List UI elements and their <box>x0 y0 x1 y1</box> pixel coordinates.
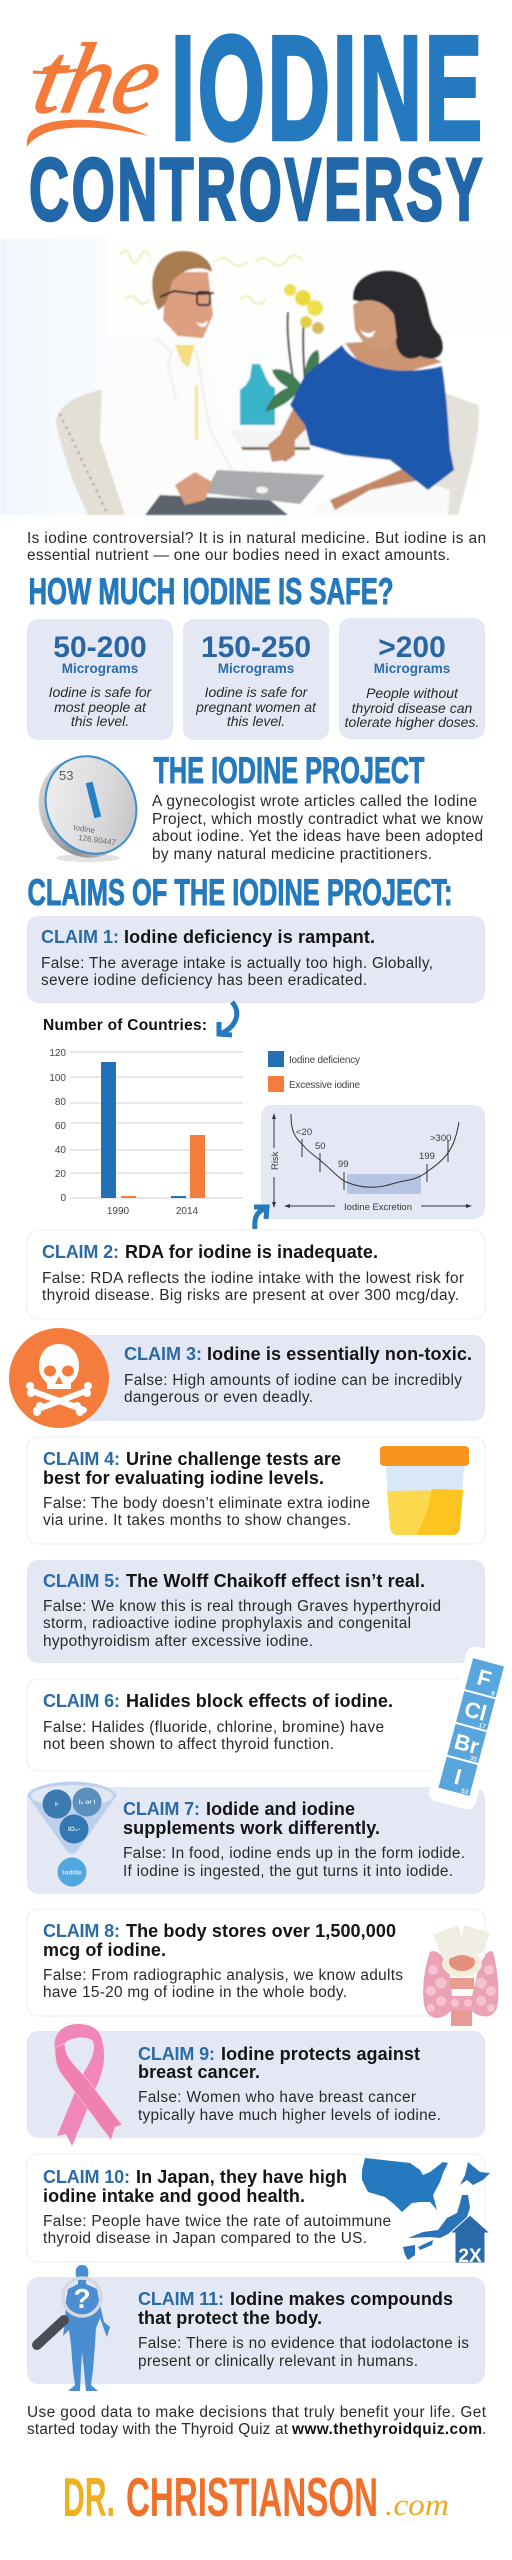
panel: 150-250 micrograms: this level. <box>227 713 285 729</box>
icon: funnel of iodine forms: Iodide <box>62 1870 82 1876</box>
bar chart: number of countries: 40 <box>55 1145 66 1156</box>
vase <box>240 364 275 425</box>
panel: 50-200 micrograms: Micrograms <box>62 661 138 676</box>
panel: claim 8 <box>27 1909 485 2016</box>
text: iodine project description: Project, which mostly contradict what we know <box>152 811 484 828</box>
panel: claim 4: via urine. It takes months to show changes. <box>43 1512 351 1529</box>
panel: claim 11: Iodine makes compounds <box>230 2289 453 2309</box>
panel: claim 9: breast cancer. <box>138 2062 260 2082</box>
panel: claim 9: False: Women who have breast cancer <box>138 2089 416 2106</box>
panel: risk curve chart: 99 <box>338 1159 349 1170</box>
panel: over 200 micrograms <box>339 618 485 739</box>
panel: 50-200 micrograms: Iodine is safe for <box>49 684 153 700</box>
panel: claim 10: thyroid disease in Japan compared to the US. <box>43 2230 367 2247</box>
panel: 50-200 micrograms: this level. <box>71 713 129 729</box>
panel: claim 2 <box>27 1230 485 1319</box>
icon: iodine element coin: 53 <box>59 768 73 783</box>
icon: thyroid gland <box>423 1925 498 2026</box>
bar chart: number of countries: 80 <box>55 1097 66 1108</box>
icon: funnel of iodine forms: IO₃- <box>68 1826 80 1833</box>
laptop <box>205 470 325 504</box>
icon: halide periodic tiles: Br <box>452 1729 482 1759</box>
panel: claim 5: False: We know this is real through Graves hyperthyroid <box>43 1598 441 1615</box>
intro text: essential nutrient — one our bodies need in exact amounts. <box>27 547 450 564</box>
chart legend: Excessive iodine <box>289 1080 360 1091</box>
right chair <box>430 393 479 515</box>
icon: iodine element coin: Iodine <box>73 823 96 835</box>
text: iodine project description: by many natural medicine practitioners. <box>152 846 432 863</box>
table <box>200 430 310 448</box>
panel: claim 9: Iodine protects against <box>221 2044 420 2064</box>
woman: arm <box>268 395 315 462</box>
man: coat <box>100 330 258 515</box>
icon: body with magnifying glass: ? <box>73 2283 91 2314</box>
photo: doctor and patient with laptop <box>0 238 512 515</box>
panel: claim 3: Iodine is essentially non-toxic. <box>207 1344 472 1364</box>
panel: claim 9: typically have much higher levels of iodine. <box>138 2107 441 2124</box>
panel: claim 11: CLAIM 11: <box>138 2289 224 2309</box>
panel: risk curve chart: 199 <box>419 1151 435 1162</box>
bar chart: number of countries: 120 <box>49 1048 66 1059</box>
icon: iodine element coin <box>21 740 153 874</box>
icon: USA and Japan maps with 2X arrow: 2X <box>458 2246 482 2267</box>
panel: claim 4: best for evaluating iodine levels. <box>43 1468 324 1488</box>
panel: claim 3: CLAIM 3: <box>124 1344 202 1364</box>
panel: claim 4: Urine challenge tests are <box>126 1449 341 1469</box>
arrow: down to chart <box>219 1002 237 1035</box>
icon: halide periodic tiles: I <box>452 1764 464 1790</box>
footer text: . <box>482 2421 486 2438</box>
panel: claim 1: False: The average intake is actually too high. Globally, <box>41 955 433 972</box>
icon: halide periodic tiles: 35 <box>469 1755 478 1764</box>
man: face and hair <box>163 272 213 338</box>
panel: claim 10: In Japan, they have high <box>136 2167 347 2187</box>
footer text <box>27 2404 487 2438</box>
panel: claim 3: False: High amounts of iodine can be incredibly <box>124 1372 462 1389</box>
panel: over 200 micrograms: tolerate higher doses. <box>345 714 479 730</box>
panel: risk curve chart <box>261 1105 485 1219</box>
icon: halide periodic tiles: Cl <box>462 1696 489 1726</box>
icon: funnel of iodine forms: I- <box>55 1801 59 1808</box>
panel: 150-250 micrograms: pregnant women at <box>195 699 317 715</box>
panel: claim 8: False: From radiographic analysis, we know adults <box>43 1967 403 1984</box>
woman: blouse <box>290 345 454 490</box>
left chair <box>56 390 130 515</box>
icon: halide periodic tiles: 17 <box>478 1722 487 1731</box>
icon: USA and Japan maps with 2X arrow <box>362 2158 490 2267</box>
bar chart: number of countries: 1990 <box>107 1206 130 1217</box>
woman: chest <box>345 340 442 374</box>
text: iodine project description: A gynecologist wrote articles called the Iodine <box>152 793 477 810</box>
panel: claim 11: False: There is no evidence that iodolactone is <box>138 2335 469 2352</box>
panel: claim 9 <box>27 2031 485 2138</box>
icon: urine sample cup <box>380 1446 469 1535</box>
text: iodine project description: about iodine. Yet the ideas have been adopted <box>152 828 483 845</box>
panel: risk curve chart: Iodine Excretion <box>344 1202 412 1213</box>
icon: skull and crossbones <box>9 1328 109 1428</box>
panel: claim 5: The Wolff Chaikoff effect isn’t real. <box>126 1571 425 1591</box>
logo: Dr. Christianson .com: .com <box>385 2487 449 2522</box>
panel: claim 6: CLAIM 6: <box>43 1691 120 1711</box>
panel: over 200 micrograms: People without <box>366 685 459 701</box>
icon: pink ribbon <box>54 2024 122 2146</box>
panel: claim 9: CLAIM 9: <box>138 2044 215 2064</box>
text: iodine project description <box>152 793 484 863</box>
panel: claim 1: Iodine deficiency is rampant. <box>124 927 375 947</box>
orchid <box>288 312 305 385</box>
chart legend: Iodine deficiency <box>289 1055 360 1066</box>
intro text <box>27 530 486 564</box>
icon: halide periodic tiles <box>427 1645 512 1811</box>
panel: claim 5 <box>27 1560 485 1663</box>
bar chart: number of countries: 20 <box>55 1169 66 1180</box>
footer text: www.thethyroidquiz.com <box>291 2421 482 2438</box>
panel: claim 1: severe iodine deficiency has been eradicated. <box>41 972 367 989</box>
panel: claim 7 <box>27 1787 485 1894</box>
panel: claim 4 <box>27 1437 485 1544</box>
panel: claim 10: iodine intake and good health. <box>43 2186 305 2206</box>
panel: claim 11: that protect the body. <box>138 2308 322 2328</box>
panel: risk curve chart: Risk <box>270 1151 281 1170</box>
intro text: Is iodine controversial? It is in natural medicine. But iodine is an <box>27 530 486 547</box>
panel: claim 1: CLAIM 1: <box>41 927 119 947</box>
panel: claim 6: Halides block effects of iodine. <box>126 1691 393 1711</box>
panel: risk curve chart: >300 <box>430 1133 451 1144</box>
bar chart: number of countries: 60 <box>55 1121 66 1132</box>
bar chart: number of countries: Number of Countries: <box>43 1017 207 1034</box>
panel: claim 8: mcg of iodine. <box>43 1940 166 1960</box>
arrow: up to risk chart <box>254 1207 267 1229</box>
bar chart: number of countries <box>43 1017 243 1217</box>
panel: claim 1 <box>27 916 485 1003</box>
title <box>25 6 485 239</box>
panel: claim 5: hypothyroidism after excessive iodine. <box>43 1633 313 1650</box>
panel: claim 8: have 15-20 mg of iodine in the whole body. <box>43 1984 347 2001</box>
panel: 150-250 micrograms <box>183 619 329 740</box>
panel: claim 7: supplements work differently. <box>123 1818 380 1838</box>
panel: claim 6: False: Halides (fluoride, chlorine, bromine) have <box>43 1719 384 1736</box>
panel: claim 10 <box>27 2154 485 2262</box>
title word: the: the <box>25 23 171 134</box>
panel: claim 8: CLAIM 8: <box>43 1921 120 1941</box>
panel: claim 4: False: The body doesn’t eliminate extra iodine <box>43 1495 370 1512</box>
panel: over 200 micrograms: thyroid disease can <box>352 700 473 716</box>
footer text: Use good data to make decisions that truly benefit your life. Get <box>27 2404 487 2421</box>
panel: 150-250 micrograms: 150-250 <box>201 631 311 664</box>
bar chart: number of countries: 2014 <box>176 1206 199 1217</box>
woman: white trousers <box>310 480 450 515</box>
man: trousers <box>145 495 288 515</box>
woman: hair <box>353 270 443 359</box>
panel: risk curve chart: 50 <box>315 1141 326 1152</box>
icon: funnel of iodine forms <box>27 1782 117 1886</box>
panel: claim 7: False: In food, iodine ends up in the form iodide. <box>123 1845 465 1862</box>
panel: claim 6: not been shown to affect thyroid function. <box>43 1736 334 1753</box>
footer text: started today with the Thyroid Quiz at <box>27 2421 289 2438</box>
panel: claim 2: False: RDA reflects the iodine intake with the lowest risk for <box>42 1270 464 1287</box>
icon: halide periodic tiles: 53 <box>460 1788 469 1796</box>
panel: claim 5: storm, radioactive iodine prophylaxis and congenital <box>43 1615 411 1632</box>
woman: face <box>353 300 397 350</box>
bar chart: number of countries: 100 <box>49 1073 66 1084</box>
panel: claim 2: RDA for iodine is inadequate. <box>125 1242 378 1262</box>
panel: claim 6 <box>27 1679 485 1771</box>
panel: claim 3 <box>27 1335 485 1421</box>
panel: claim 11: present or clinically relevant in humans. <box>138 2353 418 2370</box>
panel: risk curve chart: <20 <box>296 1127 312 1138</box>
chart legend <box>268 1051 360 1092</box>
panel: claim 2: CLAIM 2: <box>42 1242 119 1262</box>
panel: 50-200 micrograms <box>27 619 173 740</box>
panel: 50-200 micrograms: most people at <box>54 699 147 715</box>
panel: claim 5: CLAIM 5: <box>43 1571 120 1591</box>
panel: over 200 micrograms: >200 <box>378 631 446 664</box>
icon: halide periodic tiles: F <box>475 1664 494 1692</box>
panel: 150-250 micrograms: Iodine is safe for <box>205 684 309 700</box>
icon: body with magnifying glass <box>37 2265 110 2391</box>
icon: iodine element coin: 126.90447 <box>78 833 117 847</box>
panel: claim 10: False: People have twice the rate of autoimmune <box>43 2213 391 2230</box>
panel: claim 8: The body stores over 1,500,000 <box>126 1921 396 1941</box>
panel: claim 7: If iodine is ingested, the gut turns it into iodide. <box>123 1863 453 1880</box>
panel: over 200 micrograms: Micrograms <box>374 661 450 676</box>
bar chart: number of countries: 0 <box>60 1193 66 1204</box>
panel: claim 4: CLAIM 4: <box>43 1449 120 1469</box>
panel: claim 11 <box>27 2277 485 2384</box>
icon: funnel of iodine forms: I₂ or I <box>79 1799 95 1806</box>
panel: claim 7: CLAIM 7: <box>123 1799 200 1819</box>
panel: claim 2: thyroid disease. Big risks are present at over 300 mcg/day. <box>42 1287 459 1304</box>
icon: halide periodic tiles: 9 <box>490 1690 496 1698</box>
hands <box>175 472 212 505</box>
panel: 150-250 micrograms: Micrograms <box>218 661 294 676</box>
panel: claim 3: dangerous or even deadly. <box>124 1389 313 1406</box>
panel: claim 10: CLAIM 10: <box>43 2167 130 2187</box>
panel: claim 7: Iodide and iodine <box>206 1799 355 1819</box>
panel: 50-200 micrograms: 50-200 <box>53 631 147 664</box>
logo: Dr. Christianson .com: DR. <box>63 2466 115 2528</box>
